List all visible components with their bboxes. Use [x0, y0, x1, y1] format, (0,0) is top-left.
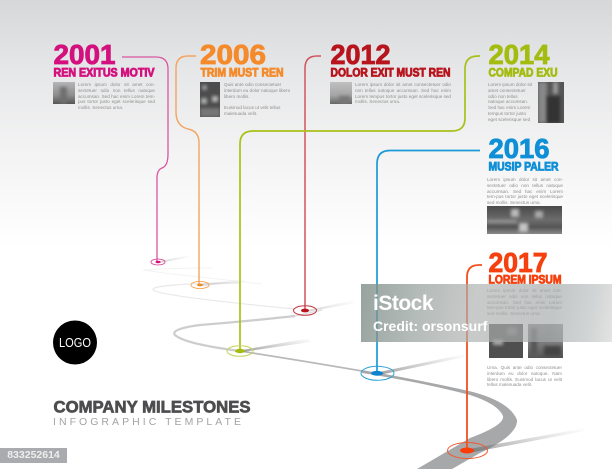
connector 2012 — [294, 56, 321, 315]
stock id badge: 833252614 — [7, 449, 60, 461]
watermark band: Credit: orsonsurf — [373, 318, 487, 334]
text 2001: Lorem ipsum dolor sit amet con-sectetuer odio non tellus natoque accumsan. Sed hac enim Lorem tem-pus tortor justo eget scelerisque sed mollis. Senectus urna. — [78, 82, 155, 110]
watermark band: iStock — [373, 292, 433, 315]
text 2014 — [488, 82, 532, 122]
heading 2014: COMPAD EXU — [488, 66, 558, 80]
connector 2001 — [122, 57, 168, 265]
title: INFOGRAPHIC TEMPLATE — [53, 416, 241, 428]
watermark band — [361, 284, 612, 342]
text 2012: Lorem ipsum dolor sit amet consectetuer odio non tellus natoque accumsan. Sed hac enim Lorem tempus tortor justo eget scelerisque sed mollis. Senectus urna. — [355, 82, 451, 104]
heading 2016 — [488, 133, 559, 174]
heading 2012: DOLOR EXIT MUST REN — [330, 66, 450, 80]
heading 2006: TRIM MUST REN — [200, 66, 284, 80]
text 2014: odio non tellus — [488, 94, 518, 98]
connector 2006 — [176, 56, 209, 289]
heading 2014 — [488, 39, 558, 80]
heading 2001: REN EXITUS MOTIV — [54, 66, 154, 80]
heading 2017: LOREM IPSUM — [488, 272, 562, 286]
winding road — [143, 268, 517, 469]
logo — [53, 320, 97, 364]
photo 2017 left — [489, 324, 523, 358]
text 2006: Quis ante odio consectetuer interdum eu dolor natoque libero libero mollis. — [224, 82, 290, 98]
text 2006 — [224, 82, 290, 116]
heading 2001: 2001 — [54, 39, 116, 70]
heading 2006 — [200, 39, 284, 80]
heading 2014: 2014 — [488, 39, 550, 70]
photo 2017 right — [528, 324, 563, 358]
pin shadows — [160, 255, 585, 453]
heading 2016: 2016 — [488, 133, 550, 164]
photo 2012 — [330, 82, 352, 104]
text 2016: Lorem ipsum dolor sit amet con-sectetuer odio non tellus natoque accumsan. Sed hac enim Lorem tem-pus tortor justo eget scelerisque sed mollis. Senectus urna. — [487, 177, 563, 205]
stock id badge — [0, 448, 67, 463]
text 2014: eget scelerisque sed — [488, 116, 530, 122]
text 2014: tempus tortor justo — [488, 111, 526, 116]
photo 2016 — [487, 206, 562, 234]
heading 2012: 2012 — [330, 39, 390, 70]
connector 2014 — [227, 56, 480, 356]
heading 2006: 2006 — [200, 39, 266, 70]
text 2017 bottom: Uma. Quis ante odio consectetuer interdum eu dolor natoque. Nam libero mollis. Euismod lacus ut velit tellus malesuada velit. — [487, 365, 562, 387]
title — [53, 398, 250, 428]
heading 2016: MUSIP PALER — [488, 160, 559, 174]
title: COMPANY MILESTONES — [54, 398, 250, 416]
heading 2001 — [54, 39, 154, 80]
logo: LOGO — [59, 335, 91, 350]
text 2017 top: Lorem ipsum dolor sit amet con-sectetuer odio non tellus natoque accumsan. Sed hac enim Lorem tem-pus tortor justo eget scelerisque sed mollis. Senectus urna. — [487, 288, 562, 316]
text 2014: Lorem ipsum dolor sit — [488, 82, 532, 87]
text 2014: natoque accumsan. — [488, 99, 528, 104]
photo 2001 — [53, 82, 75, 104]
text 2014: amet consectetuer — [488, 88, 526, 93]
text 2006: Euismod lacus ut velit tellus malesuada velit. — [224, 105, 280, 116]
text 2014: Sed hac enim Lorem — [488, 105, 530, 110]
connector 2017 — [448, 265, 488, 458]
heading 2017: 2017 — [488, 247, 548, 278]
connector 2016 — [361, 150, 480, 380]
heading 2017 — [488, 247, 562, 286]
photo 2014 — [538, 82, 564, 123]
heading 2012 — [330, 39, 450, 80]
photo 2006 — [200, 82, 220, 117]
